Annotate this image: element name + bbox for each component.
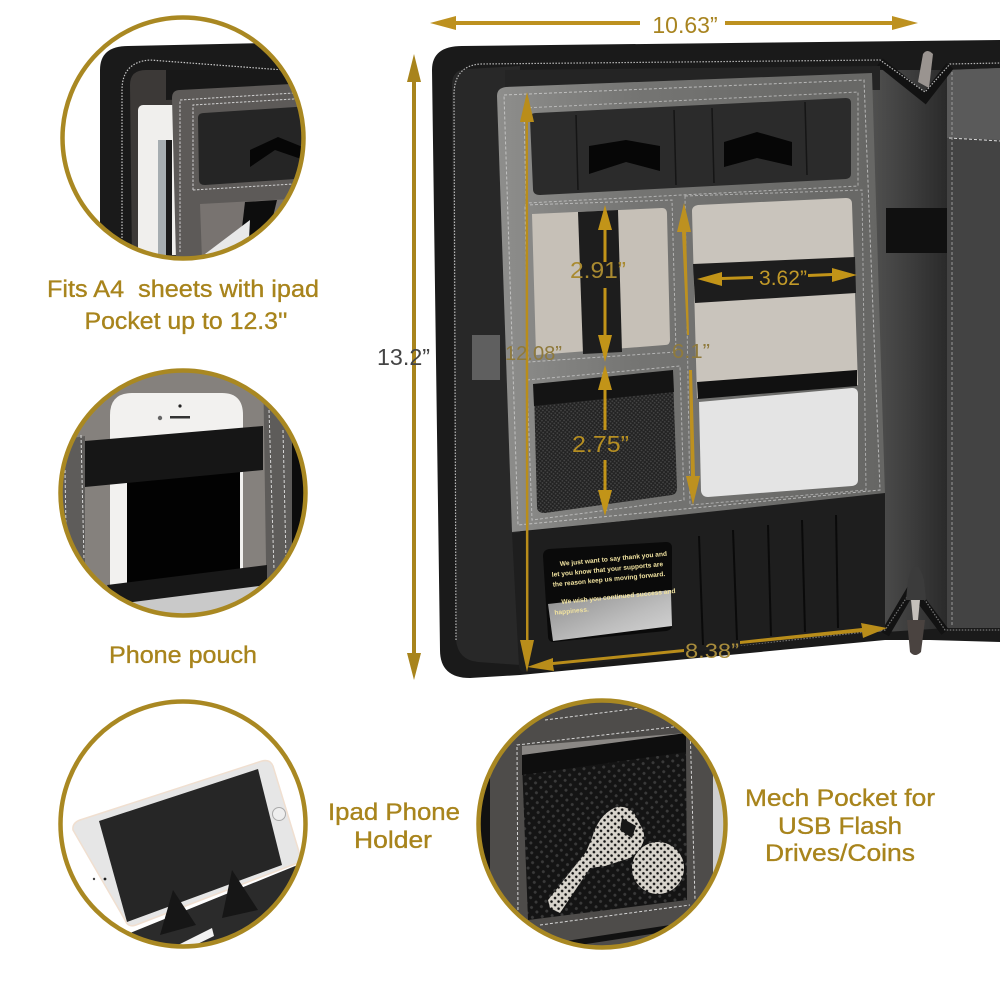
dimension: strap window 2.91 inches: 2.91” xyxy=(570,257,626,283)
circle ring xyxy=(62,18,304,258)
dimension: strap 3.62 inches: 3.62” xyxy=(759,267,807,290)
caption: phone holder xyxy=(328,799,460,854)
mesh pocket xyxy=(522,745,687,920)
phone screen xyxy=(127,470,240,588)
slot chevron right xyxy=(724,132,792,167)
top zipper pull xyxy=(918,51,933,88)
thank-you card text: the reason keep us moving forward. xyxy=(552,571,666,589)
feature circle: phone pouch closeup xyxy=(58,368,308,618)
strap xyxy=(242,200,277,236)
dimension: right column 6.1 inches xyxy=(672,203,710,505)
tissue xyxy=(205,220,250,254)
folio base xyxy=(132,866,296,944)
elastic band xyxy=(85,426,263,487)
dimension: overall height 13.2 inches xyxy=(377,54,430,680)
thank-you card text: let you know that your supports are xyxy=(552,561,664,579)
caption: phone pouch: Phone pouch xyxy=(109,642,257,669)
card slits xyxy=(699,515,838,645)
folio outer shell xyxy=(432,40,1000,678)
zipper stitching xyxy=(454,60,1000,640)
home button xyxy=(272,808,286,820)
pocket edge xyxy=(107,565,267,602)
dimension: pad height 12.08 inches xyxy=(505,92,562,672)
dimension: overall height 13.2 inches: 13.2” xyxy=(377,344,430,370)
white pocket window xyxy=(699,388,858,497)
beige window xyxy=(200,200,284,255)
caption: A4 sheets and iPad pocket: Fits A4 sheets with ipad xyxy=(47,276,319,303)
folio inner left lining xyxy=(452,66,520,665)
phone body xyxy=(73,761,300,926)
bottom black card section xyxy=(512,493,885,672)
caption: mesh pocket for USB drives and coins: USB Flash xyxy=(778,813,902,840)
caption: phone holder: Ipad Phone xyxy=(328,799,460,826)
pocket stitching xyxy=(527,366,684,520)
organizer pad xyxy=(497,73,885,672)
iPad xyxy=(138,105,176,255)
lower stitching band xyxy=(568,925,669,944)
caption: A4 sheets and iPad pocket: Pocket up to 12.3'' xyxy=(84,308,288,335)
dimension: pad height 12.08 inches: 12.08” xyxy=(505,343,562,365)
right page xyxy=(947,68,1000,628)
zipper opening top xyxy=(880,62,950,98)
dimension: right column 6.1 inches: 6.1” xyxy=(672,341,710,363)
horizontal elastic strap xyxy=(693,257,856,303)
circle ring xyxy=(60,702,306,946)
left pen tab xyxy=(472,335,500,380)
circle ring xyxy=(60,370,306,616)
ID card window xyxy=(543,542,677,642)
back sleeve top edge xyxy=(505,66,880,90)
left beige window xyxy=(532,208,670,355)
feature circle: phone holder closeup xyxy=(55,695,315,955)
thank-you card text xyxy=(550,550,677,617)
inner lining xyxy=(130,70,176,256)
left strip xyxy=(62,436,85,562)
zipper opening bottom xyxy=(885,588,945,634)
holder triangles xyxy=(160,890,196,935)
right pocket band xyxy=(697,370,857,399)
elastic band on spine xyxy=(886,208,947,253)
dimension: overall width 10.63 inches: 10.63” xyxy=(652,12,718,38)
pocket lip xyxy=(522,733,682,755)
pad outer stitching xyxy=(504,80,880,525)
dimension: pad width 8.38 inches: 8.38” xyxy=(685,640,739,663)
dimension: mesh pocket 2.75 inches xyxy=(572,365,629,516)
band fold lines xyxy=(576,102,807,190)
phone screen xyxy=(99,769,282,922)
vertical elastic strap xyxy=(578,210,622,354)
coin xyxy=(632,842,684,894)
caption: mesh pocket for USB drives and coins: Mech Pocket for xyxy=(745,785,935,812)
dimension: strap 3.62 inches xyxy=(697,267,857,290)
caption: A4 sheets and iPad pocket xyxy=(47,276,319,335)
caption: mesh pocket for USB drives and coins: Drives/Coins xyxy=(765,840,915,867)
thank-you card text: happiness. xyxy=(554,606,589,617)
ribbed band xyxy=(522,733,686,775)
window reflection xyxy=(548,590,672,641)
side strip xyxy=(264,404,292,579)
feature circle: iPad pocket closeup xyxy=(60,15,310,265)
dimension: strap window 2.91 inches xyxy=(570,205,626,362)
phone xyxy=(110,393,243,590)
dimension: overall width 10.63 inches xyxy=(430,12,918,38)
caption: mesh pocket for USB drives and coins xyxy=(745,785,935,867)
pad body xyxy=(497,73,885,532)
open padfolio product photo xyxy=(432,40,1000,678)
cable xyxy=(180,928,214,944)
thank-you card text: We just want to say thank you and xyxy=(560,551,667,568)
dimension: mesh pocket 2.75 inches: 2.75” xyxy=(572,431,629,457)
dimension: pad width 8.38 inches xyxy=(527,623,887,671)
circle ring xyxy=(478,700,726,948)
right edge xyxy=(713,776,724,872)
folio spine xyxy=(860,70,947,632)
top black band with slots xyxy=(530,98,851,195)
band stitching xyxy=(524,92,858,203)
mesh pocket xyxy=(534,372,677,513)
bottom zipper pull xyxy=(906,566,926,600)
black band xyxy=(198,106,310,185)
grey organizer pad xyxy=(172,84,297,256)
feature circle: mesh pocket closeup xyxy=(470,695,735,960)
key xyxy=(548,807,644,913)
right beige window xyxy=(692,198,858,398)
slot chevron left xyxy=(589,140,660,174)
folio corner xyxy=(100,43,280,244)
thank-you card text: We wish you continued success and xyxy=(561,588,676,606)
slot xyxy=(250,137,301,167)
caption: phone holder: Holder xyxy=(354,827,432,854)
stitching xyxy=(517,725,695,920)
